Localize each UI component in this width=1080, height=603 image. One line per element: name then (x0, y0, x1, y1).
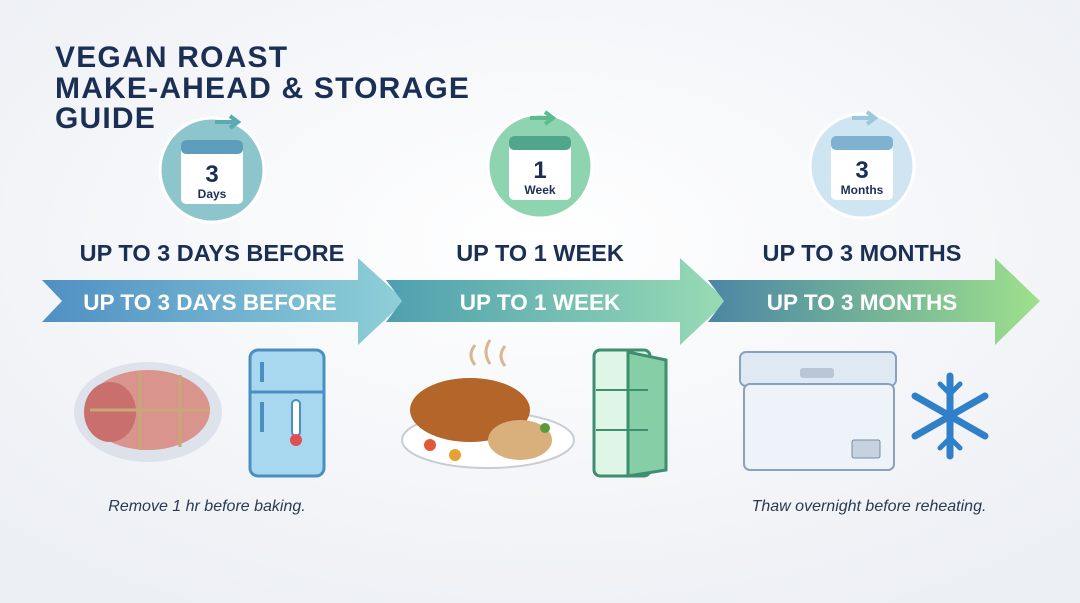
title (55, 41, 470, 135)
icon: calendar 3 days: Days (198, 187, 227, 201)
icon: wrapped roast (74, 362, 222, 462)
icon: calendar 1 week: 1 (533, 157, 547, 184)
caption 1: Remove 1 hr before baking. (108, 498, 306, 515)
headings (80, 240, 961, 266)
arrow 1: UP TO 3 DAYS BEFORE (83, 290, 337, 315)
icon: calendar 1 week (488, 112, 592, 218)
arrow 2: UP TO 1 WEEK (460, 290, 621, 315)
icon: calendar 3 months: 3 (855, 157, 869, 184)
title: MAKE-AHEAD & STORAGE (55, 72, 470, 105)
title: GUIDE (55, 102, 156, 135)
arrow 3: UP TO 3 MONTHS (767, 290, 957, 315)
headings: UP TO 3 MONTHS (763, 240, 961, 266)
arrow 2 (386, 258, 727, 345)
title: VEGAN ROAST (55, 41, 288, 74)
arrow 1 (42, 258, 405, 345)
icon: calendar 1 week: Week (524, 183, 556, 197)
icon: chest freezer (740, 352, 896, 470)
arrow 3 (708, 258, 1040, 345)
icon: snowflake (915, 376, 985, 456)
caption 3: Thaw overnight before reheating. (752, 498, 986, 515)
icon: calendar 3 months: Months (841, 183, 884, 197)
headings: UP TO 1 WEEK (456, 240, 624, 266)
icon: calendar 3 months (810, 112, 914, 218)
icon: calendar 3 days: 3 (205, 161, 219, 188)
headings: UP TO 3 DAYS BEFORE (80, 240, 344, 266)
icon: open fridge (594, 350, 666, 476)
icon: fridge (250, 350, 324, 476)
icon: calendar 3 days (160, 116, 264, 222)
icon: roast on plate (402, 340, 574, 468)
